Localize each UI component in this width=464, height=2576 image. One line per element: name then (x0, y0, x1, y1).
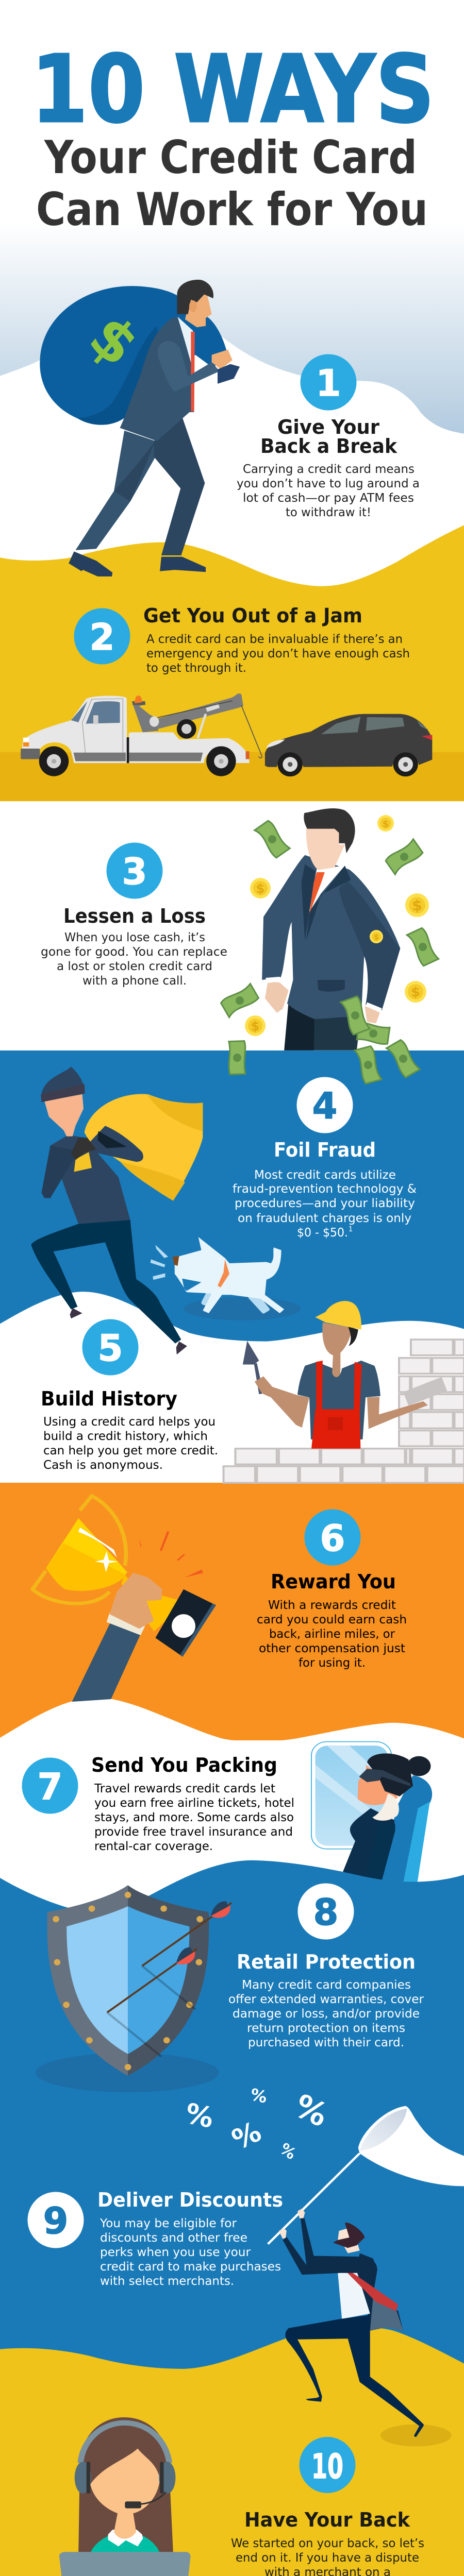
body text: Cash is anonymous. (43, 1459, 163, 1472)
body text (257, 1599, 407, 1670)
number badge 7: 7 (38, 1766, 62, 1808)
illustration: man in suit losing money (220, 808, 439, 1084)
dollar sign on bag: $ (77, 302, 151, 380)
tow boom and post (132, 693, 262, 758)
panel: step 8 retail protection (228, 1884, 424, 2049)
trophy stem (121, 1575, 178, 1631)
body text: to get through it. (146, 662, 246, 675)
thief shoes (70, 1308, 187, 1354)
rivets (53, 1892, 203, 2070)
body text: purchased with their card. (248, 2036, 404, 2049)
body text: Carrying a credit card means (243, 463, 415, 476)
background: section 7 white wave (0, 1697, 464, 1912)
shield shadow (36, 2053, 219, 2092)
illustration: builder laying bricks (224, 1301, 464, 1483)
gold coins: $ (256, 882, 264, 896)
body text: on fraudulent charges is only (238, 1212, 411, 1225)
illustration: man carrying money bag (40, 280, 240, 577)
suit, head and arm (120, 280, 240, 441)
body text: provide free travel insurance and (94, 1825, 293, 1839)
spare wheel (177, 719, 196, 739)
body text (146, 633, 410, 675)
number badge 5 (82, 1319, 138, 1376)
title (31, 35, 435, 236)
number badge 3: 3 (122, 851, 147, 893)
panel: step 6 reward you (257, 1510, 407, 1670)
number badge 9 (28, 2192, 84, 2248)
body text (100, 2217, 281, 2288)
body text: emergency and you don’t have enough cash (146, 647, 410, 660)
body text (228, 1978, 424, 2049)
heading: Send You Packing (91, 1754, 277, 1776)
gold coins: $ (383, 819, 389, 829)
shadow (380, 2425, 452, 2446)
background: section 1 white wave (0, 313, 464, 578)
illustration: shield with arrows (36, 1885, 231, 2092)
shirt (90, 2534, 160, 2553)
panel: step 9 deliver discounts (28, 2189, 283, 2288)
number badge 8: 8 (313, 1891, 338, 1934)
body text: perks when you use your (100, 2246, 251, 2259)
percent signs: % (289, 2087, 334, 2134)
panel: step 4 foil fraud (233, 1077, 417, 1240)
man figure (279, 2209, 424, 2437)
legs and shoes (69, 412, 206, 577)
body text (231, 2537, 424, 2576)
body text: Travel rewards credit cards let (94, 1782, 275, 1795)
number badge 8 (298, 1884, 354, 1939)
body text: you earn free airline tickets, hotel (94, 1797, 294, 1810)
body text (41, 931, 227, 988)
body text: with select merchants. (100, 2275, 234, 2288)
brick wall (224, 1340, 464, 1483)
thief legs (31, 1220, 181, 1344)
arrows (107, 1901, 231, 2057)
body text (237, 463, 420, 519)
percent signs: % (248, 2084, 269, 2107)
gold coins: $ (374, 933, 379, 942)
gold coins: $ (412, 897, 422, 914)
heading: Lessen a Loss (63, 905, 206, 927)
heading: Get You Out of a Jam (143, 604, 362, 627)
gold coins (245, 815, 429, 1036)
background: section 4 blue band (0, 1050, 464, 1483)
body text: fraud-prevention technology & (233, 1182, 417, 1196)
headset (75, 2462, 176, 2509)
trophy base (155, 1589, 216, 1656)
sleeve (72, 1618, 142, 1702)
panel: step 7 send you packing (22, 1754, 294, 1853)
number badge 5: 5 (98, 1327, 123, 1369)
body text: Many credit card companies (242, 1978, 411, 1992)
panel: step 5 build history (41, 1319, 218, 1472)
background: section 10 yellow wave (0, 2327, 464, 2576)
body text: A credit card can be invaluable if there’s an (146, 633, 403, 646)
number badge 7 (22, 1758, 78, 1814)
shield frame (47, 1885, 128, 2076)
body text: damage or loss, and/or provide (233, 2007, 420, 2021)
body text: lot of cash—or pay ATM fees (243, 492, 414, 505)
truck wheels (39, 746, 236, 776)
hand (109, 1573, 162, 1629)
heading: Foil Fraud (274, 1139, 376, 1161)
body text: With a rewards credit (268, 1599, 396, 1612)
percent signs: % (276, 2140, 299, 2163)
body text: stays, and more. Some cards also (94, 1811, 294, 1824)
body text: $0 - $50. (297, 1226, 348, 1240)
illustration: support agent with laptop (46, 2417, 204, 2576)
body text: discounts and other free (100, 2231, 247, 2245)
body text: 1 (349, 1226, 353, 1233)
body text: offer extended warranties, cover (228, 1993, 424, 2006)
illustration: tow truck and car (21, 693, 432, 776)
body text: procedures—and your liability (235, 1197, 415, 1210)
background: section 2 yellow wave (0, 525, 464, 801)
thief arms and gloves (90, 1126, 143, 1162)
body text: back, airline miles, or (269, 1628, 395, 1641)
number badge 2 (74, 608, 130, 665)
thief torso (51, 1135, 130, 1224)
shield blue face (67, 1906, 128, 2054)
body text: card you could earn cash (257, 1613, 407, 1626)
body text: When you lose cash, it’s (64, 931, 205, 944)
number badge 4 (297, 1077, 353, 1133)
background: section 8 blue wave (0, 1860, 464, 2148)
gold coins: $ (251, 1019, 259, 1033)
sparks (139, 1531, 203, 1578)
thief head and beanie (44, 1094, 84, 1137)
number badge 10 (299, 2437, 356, 2493)
heading: Give Your (277, 416, 379, 438)
body text: to withdraw it! (286, 506, 371, 519)
body text: rental-car coverage. (94, 1840, 213, 1853)
body text: with a phone call. (82, 974, 187, 988)
panel: step 3 lessen a loss (41, 843, 227, 988)
body text: end on it. If you have a dispute (236, 2551, 419, 2565)
percent signs (183, 2084, 334, 2163)
trophy cup (46, 1518, 127, 1591)
heading: Back a Break (260, 435, 397, 457)
title line: Your Credit Card: Your Credit Card (44, 131, 417, 184)
body text: credit card to make purchases (100, 2260, 281, 2274)
body text: can help you get more credit. (43, 1444, 218, 1458)
illustration: man catching discounts with net (268, 2106, 464, 2446)
heading: Retail Protection (237, 1951, 416, 1973)
butterfly net (268, 2106, 464, 2244)
percent signs: % (227, 2115, 266, 2156)
gold coins: $ (411, 985, 420, 999)
percent signs: % (183, 2097, 217, 2134)
floating dollar bills (220, 820, 439, 1084)
trophy handles (32, 1496, 126, 1603)
heading: Build History (41, 1387, 177, 1410)
body text: a lost or stolen credit card (57, 960, 212, 973)
body text: Most credit cards utilize (254, 1168, 396, 1182)
heading (260, 416, 397, 457)
loot bag (85, 1094, 203, 1201)
body text: Using a credit card helps you (43, 1415, 216, 1429)
illustration: thief running with loot bag (31, 1066, 203, 1354)
number badge 9: 9 (43, 2200, 68, 2242)
number badge 1: 1 (316, 362, 341, 404)
heading: Deliver Discounts (97, 2189, 283, 2211)
body text (43, 1415, 218, 1472)
heading: Have Your Back (244, 2509, 410, 2531)
panel: step 1 give your back a break (237, 354, 420, 519)
background: section 1 sky gradient (0, 222, 464, 435)
laptop (59, 2552, 190, 2576)
body text: build a credit history, which (43, 1430, 208, 1443)
number badge 2: 2 (90, 616, 114, 658)
hair (78, 2417, 173, 2553)
illustration: barking dog (151, 1237, 301, 1320)
number badge 6: 6 (320, 1517, 345, 1560)
illustration: sleeping traveller by plane window (311, 1742, 432, 1886)
body text: We started on your back, so let’s (231, 2537, 424, 2550)
heading: Reward You (271, 1570, 396, 1593)
black hatchback car (265, 714, 432, 776)
headband (80, 2423, 169, 2463)
background: section 5 white wave (0, 1292, 464, 1483)
trowel (243, 1341, 263, 1394)
background: sections 8 and 9 blue band (0, 2143, 464, 2401)
body text: for using it. (299, 1656, 366, 1670)
man in suit (262, 808, 400, 1050)
body text: gone for good. You can replace (41, 945, 227, 959)
face and neck (90, 2449, 160, 2539)
body text: return protection on items (247, 2022, 405, 2035)
panel: step 2 get you out of a jam (74, 604, 410, 675)
money bag (40, 286, 227, 425)
truck body (21, 696, 249, 763)
builder figure (255, 1323, 428, 1449)
panel: step 10 have your back (231, 2437, 424, 2576)
body text (233, 1168, 417, 1240)
number badge 6 (304, 1510, 361, 1565)
number badge 1 (300, 354, 357, 410)
number badge 4: 4 (312, 1085, 337, 1127)
hard hat (316, 1301, 361, 1330)
body text: you don’t have to lug around a (237, 477, 420, 490)
brick in hand (403, 1377, 447, 1406)
background: section 6 orange band (0, 1483, 464, 1740)
body text: You may be eligible for (100, 2217, 237, 2230)
number badge 3 (106, 843, 163, 899)
body text (94, 1782, 294, 1853)
number badge 10: 10 (311, 2447, 343, 2486)
body text: other compensation just (259, 1642, 405, 1655)
illustration: hand holding trophy (32, 1496, 216, 1702)
